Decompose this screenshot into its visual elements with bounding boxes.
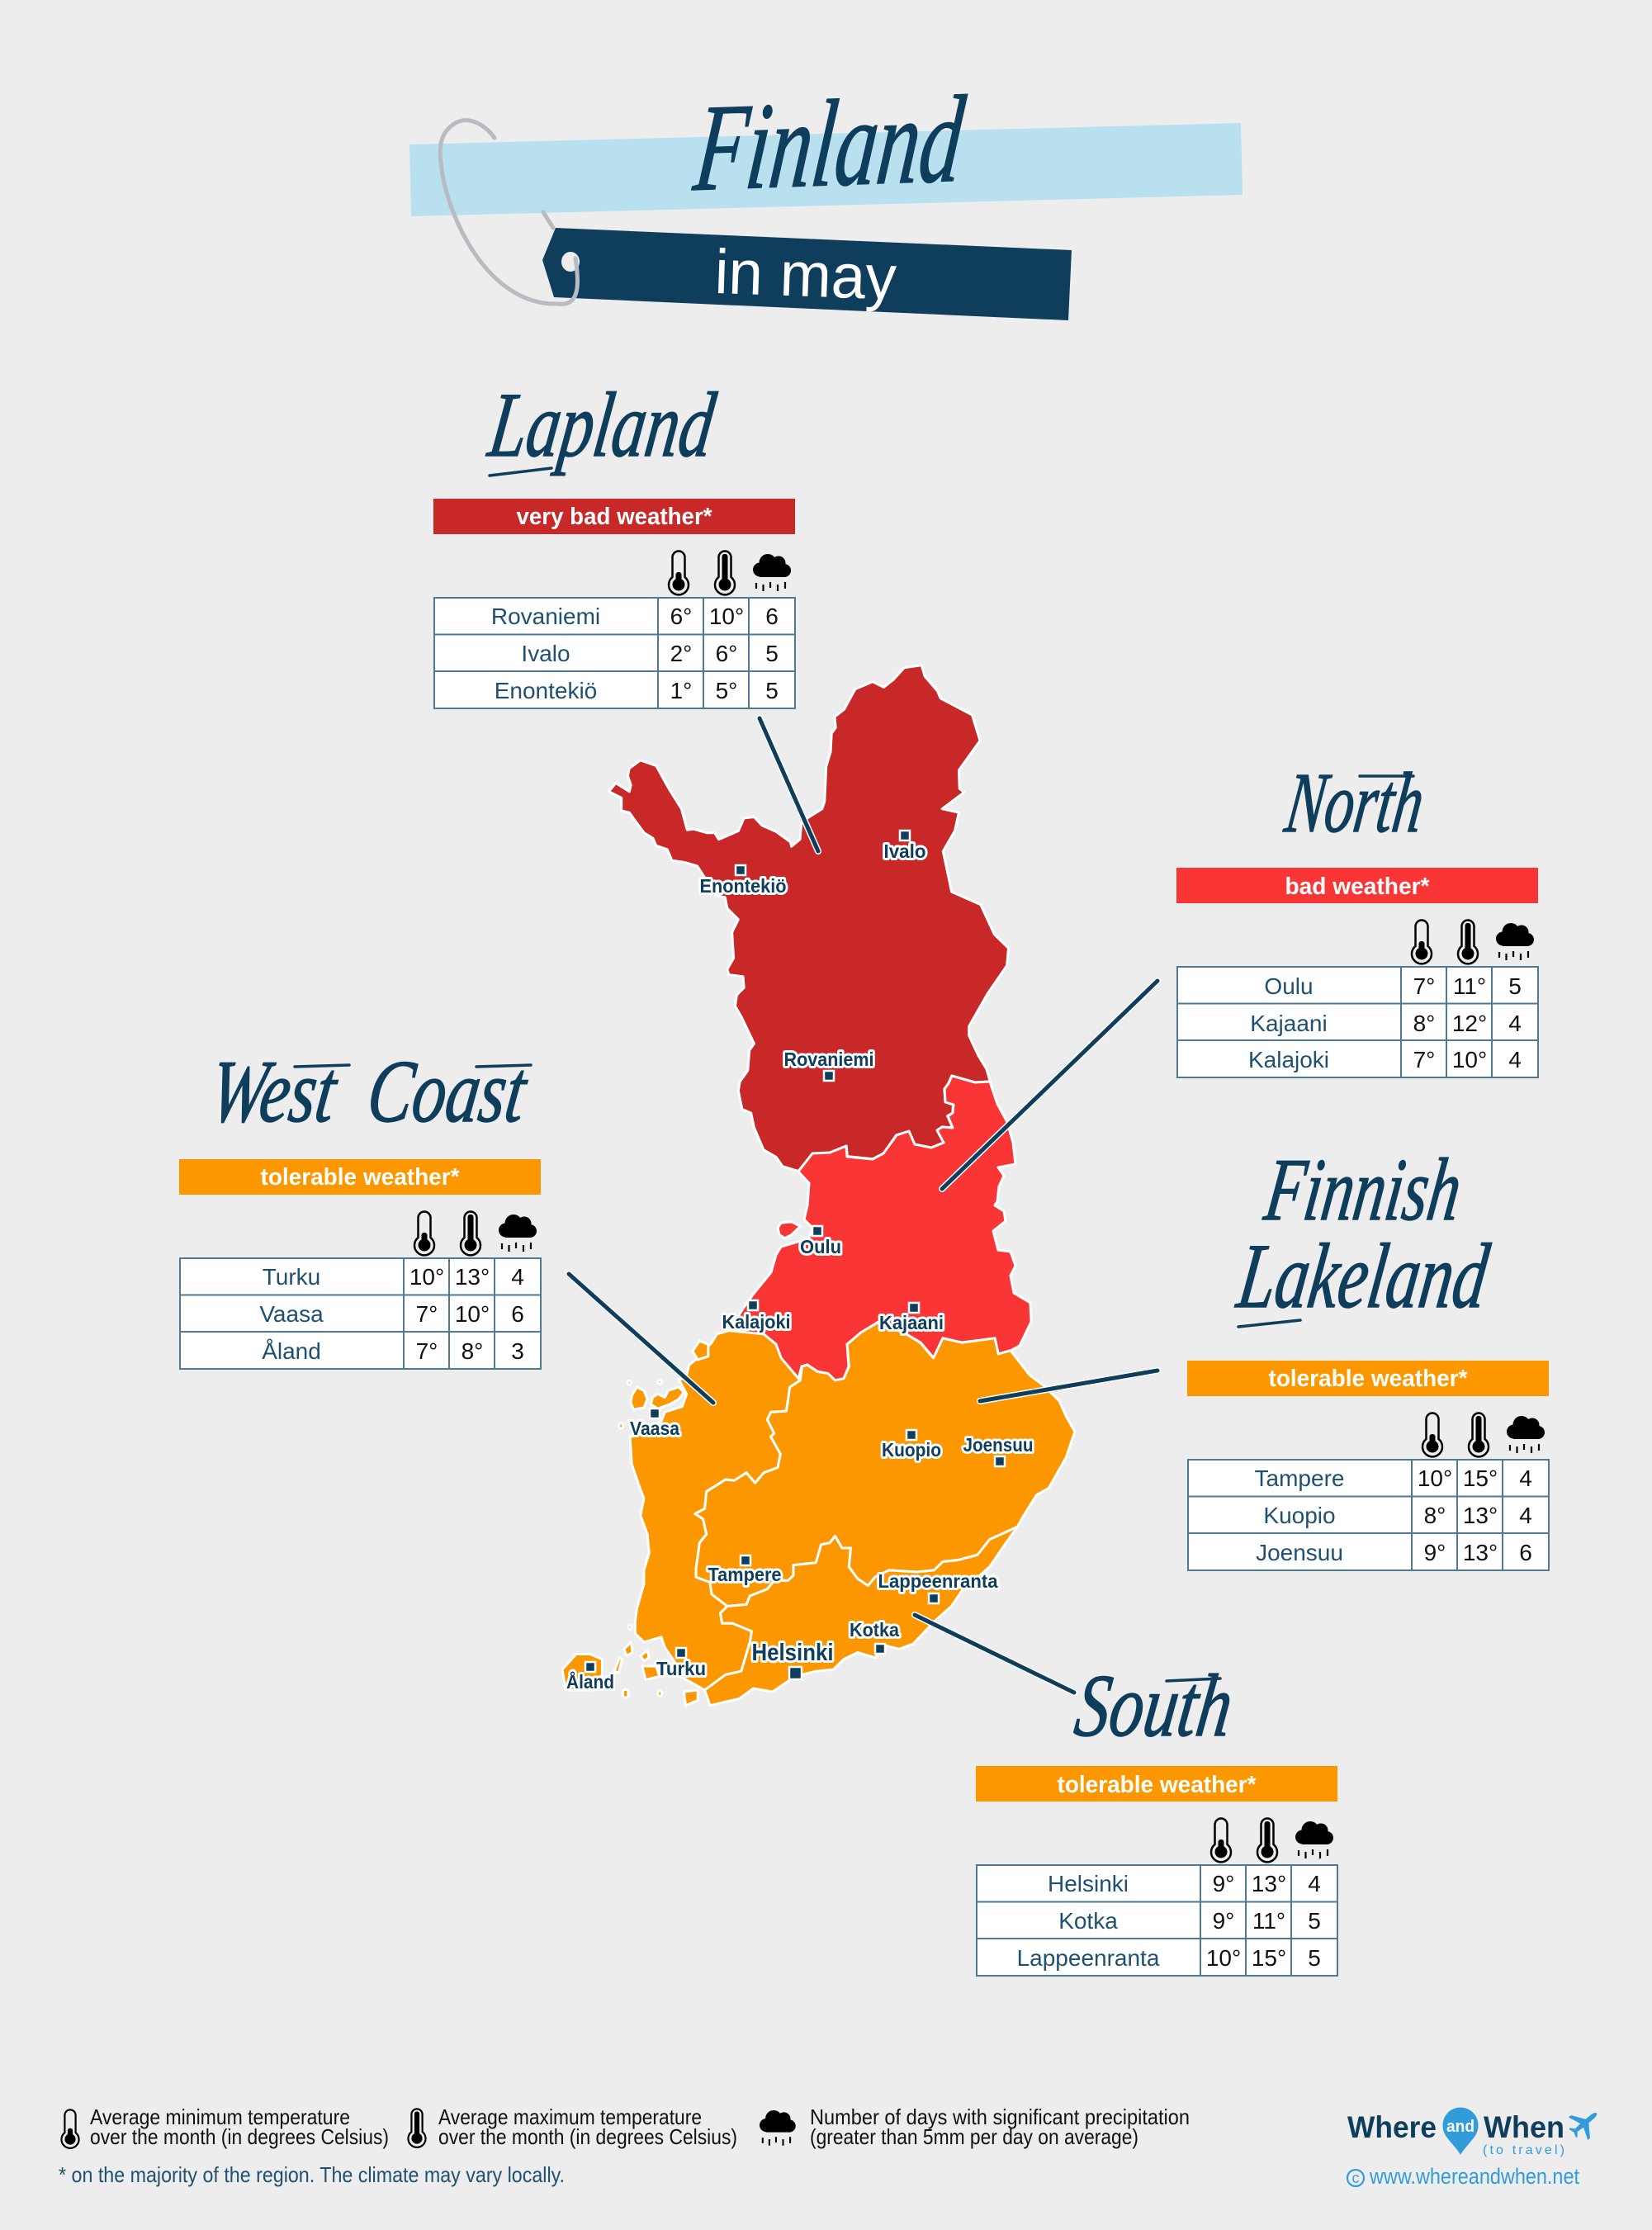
city: Kajaani: Kajaani (879, 1312, 944, 1333)
website credit: c (1352, 2170, 1359, 2186)
city: Rovaniemi (784, 1049, 873, 1081)
weather banner (1176, 868, 1538, 903)
city: Helsinki (751, 1640, 834, 1679)
climate table: Kuopio (1263, 1503, 1336, 1528)
climate table (434, 598, 795, 708)
city: Kuopio: Kuopio (882, 1439, 941, 1461)
heading: Finnish Lakeland: Finnish (1259, 1140, 1467, 1239)
climate table: 6 (765, 604, 779, 629)
city: Tampere (708, 1555, 781, 1585)
column icons (1211, 1818, 1333, 1862)
icon: map pin (1442, 2107, 1479, 2155)
city: Kotka: Kotka (850, 1619, 899, 1641)
city: Lappeenranta: Lappeenranta (878, 1570, 998, 1592)
title band (409, 123, 1243, 216)
city: Kotka (850, 1619, 899, 1654)
west coast islands (614, 1341, 708, 1706)
city: Enontekiö (700, 865, 786, 897)
weather banner: tolerable weather* (1268, 1366, 1468, 1392)
title: Finland: Finland (689, 70, 970, 217)
climate table: 4 (1508, 1047, 1522, 1072)
climate table: 6° (670, 604, 692, 629)
legend text: precipitation: Number of days with significant precipitation (810, 2105, 1190, 2129)
climate table: 6° (716, 641, 737, 666)
logo word: When: When (1484, 2110, 1564, 2144)
climate table: 4 (1508, 1011, 1522, 1036)
climate table: 7° (416, 1338, 438, 1364)
logo word: Where: Where (1347, 2110, 1437, 2144)
tag string (440, 121, 578, 304)
climate table: 8° (1413, 1011, 1435, 1036)
climate table: 10° (1418, 1465, 1452, 1491)
climate table: 5 (1508, 973, 1522, 999)
climate table: 4 (511, 1264, 524, 1290)
heading: West Coast: West Coast (205, 1042, 534, 1141)
climate table: 5 (765, 641, 779, 666)
climate table: Vaasa (259, 1301, 324, 1327)
climate table: Kotka (1058, 1908, 1118, 1934)
footnote: * on the majority of the region. The climate may vary locally. (59, 2162, 565, 2187)
logo: Where and When (1347, 2102, 1607, 2189)
icon: precipitation (760, 2110, 796, 2146)
legend text: maximum temperature (438, 2105, 737, 2149)
climate table: Enontekiö (495, 678, 597, 703)
legend (59, 2105, 1190, 2187)
climate table: 11° (1453, 973, 1486, 999)
city: Turku: Turku (656, 1658, 706, 1679)
weather banner (433, 499, 795, 534)
climate table: Rovaniemi (491, 604, 600, 629)
logo tagline: (to travel) (1483, 2143, 1564, 2157)
climate table: 2° (670, 641, 692, 666)
column icons (1412, 920, 1534, 963)
climate table: 5° (716, 678, 737, 703)
city: Ivalo: Ivalo (883, 840, 926, 862)
climate table: 10° (1206, 1945, 1241, 1971)
legend text: precipitation: (greater than 5mm per day on average) (810, 2124, 1138, 2149)
city: Vaasa (630, 1409, 679, 1439)
callout line: South (915, 1615, 1074, 1693)
legend text: minimum temperature: Average minimum temperature (90, 2105, 350, 2129)
climate table: Oulu (1264, 973, 1314, 999)
subtitle: in may: in may (713, 237, 897, 314)
weather banner (976, 1766, 1337, 1802)
climate table: 5 (765, 678, 779, 703)
climate table: 6 (1519, 1540, 1532, 1565)
heading: North: North (1280, 755, 1430, 850)
climate table: 6 (511, 1301, 524, 1327)
climate table: Turku (263, 1264, 320, 1290)
climate table (1188, 1460, 1549, 1570)
climate table: 7° (1413, 1047, 1435, 1072)
climate table: Lappeenranta (1017, 1945, 1160, 1971)
island: Åland (562, 1654, 602, 1690)
heading: South: South (1070, 1656, 1238, 1755)
map of Finland (562, 665, 1075, 1706)
panel: Lapland (433, 374, 795, 708)
climate table: 4 (1519, 1503, 1532, 1528)
climate table: 15° (1463, 1465, 1498, 1491)
legend text: precipitation (810, 2105, 1190, 2149)
city: Åland: Åland (566, 1670, 614, 1693)
island: Hailuoto (778, 1222, 800, 1238)
climate table: 3 (511, 1338, 524, 1364)
climate table: 12° (1452, 1011, 1487, 1036)
legend text: maximum temperature: over the month (in degrees Celsius) (438, 2124, 737, 2149)
climate table: 11° (1252, 1908, 1285, 1934)
climate table: Joensuu (1256, 1540, 1343, 1565)
climate table: 8° (1424, 1503, 1446, 1528)
climate table: 9° (1213, 1908, 1234, 1934)
climate table: 4 (1519, 1465, 1532, 1491)
panel: West Coast (179, 1042, 541, 1369)
climate table: 8° (462, 1338, 483, 1364)
region: Finnish Lakeland (695, 1322, 1075, 1606)
panel: North (1176, 755, 1538, 1077)
climate table: 5 (1308, 1945, 1321, 1971)
heading: Finnish Lakeland: Lakeland (1231, 1225, 1494, 1328)
callout line: Finnish Lakeland (980, 1371, 1157, 1401)
climate table: 13° (1463, 1540, 1498, 1565)
city: Vaasa: Vaasa (630, 1418, 679, 1439)
icon: plane (1563, 2102, 1607, 2145)
column icons (669, 552, 791, 594)
region: Lapland (608, 665, 1009, 1172)
city: Oulu: Oulu (800, 1236, 841, 1257)
climate table: 10° (455, 1301, 490, 1327)
weather banner: tolerable weather* (1057, 1772, 1257, 1798)
climate table: 10° (409, 1264, 444, 1290)
city: Joensuu (963, 1434, 1034, 1466)
climate table: 7° (416, 1301, 438, 1327)
city: Helsinki: Helsinki (751, 1640, 834, 1666)
callout line: Lapland (760, 718, 818, 851)
city: Enontekiö: Enontekiö (700, 875, 786, 897)
weather banner: tolerable weather* (261, 1164, 460, 1191)
city: Kalajoki: Kalajoki (722, 1311, 791, 1333)
legend text: minimum temperature: over the month (in degrees Celsius) (90, 2124, 389, 2149)
region: West Coast (562, 1331, 800, 1706)
column icons (1422, 1413, 1545, 1456)
panel: South (976, 1656, 1337, 1976)
climate table (977, 1865, 1337, 1976)
climate table: Åland (262, 1338, 321, 1364)
city: Ivalo (883, 831, 926, 862)
climate table: 13° (1463, 1503, 1498, 1528)
climate table: 15° (1252, 1945, 1286, 1971)
climate table: 10° (709, 604, 744, 629)
climate table: Ivalo (521, 641, 570, 666)
climate table: Helsinki (1048, 1871, 1129, 1896)
logo word: and: and (1446, 2118, 1474, 2136)
climate table: 4 (1308, 1871, 1321, 1896)
column icons (414, 1212, 537, 1255)
west coast mainland (630, 1331, 800, 1690)
weather banner (1187, 1361, 1549, 1396)
climate table: 5 (1308, 1908, 1321, 1934)
city: Kalajoki (722, 1300, 791, 1333)
icon: maximum temperature (408, 2109, 426, 2147)
region: South (705, 1527, 1017, 1706)
city: Tampere: Tampere (708, 1564, 781, 1585)
climate table: 13° (1252, 1871, 1286, 1896)
climate table: Kalajoki (1248, 1047, 1329, 1072)
climate table: 13° (455, 1264, 490, 1290)
city: Kajaani (879, 1303, 944, 1333)
city: Kuopio (882, 1430, 941, 1461)
city: Joensuu: Joensuu (963, 1434, 1034, 1456)
icon: minimum temperature (61, 2109, 79, 2148)
weather banner (179, 1159, 541, 1195)
climate table: 7° (1413, 973, 1435, 999)
callout line: West Coast (569, 1274, 713, 1403)
city: Turku (656, 1648, 706, 1679)
city: Lappeenranta (878, 1570, 998, 1603)
panel: Finnish Lakeland (1187, 1140, 1549, 1570)
city: Rovaniemi: Rovaniemi (784, 1049, 873, 1070)
callout line: North (942, 981, 1157, 1189)
city: Oulu (800, 1226, 841, 1257)
climate table (180, 1258, 541, 1369)
luggage tag (542, 228, 1072, 320)
climate table: 9° (1213, 1871, 1234, 1896)
climate table: Kajaani (1250, 1011, 1328, 1036)
tag hole (561, 252, 580, 272)
weather banner: bad weather* (1285, 874, 1430, 900)
legend text: minimum temperature (90, 2105, 389, 2149)
legend text: maximum temperature: Average maximum temperature (438, 2105, 702, 2129)
city: Åland (566, 1662, 614, 1693)
website credit: www.whereandwhen.net (1369, 2164, 1579, 2189)
heading: Finnish Lakeland (1231, 1140, 1494, 1328)
region: North (729, 1076, 1031, 1380)
heading: Lapland: Lapland (482, 374, 721, 476)
weather banner: very bad weather* (517, 504, 712, 530)
climate table: Tampere (1255, 1465, 1344, 1491)
title block (409, 70, 1243, 320)
climate table: 10° (1452, 1047, 1487, 1072)
climate table (1177, 967, 1538, 1077)
climate table: 1° (670, 678, 692, 703)
climate table: 9° (1424, 1540, 1446, 1565)
